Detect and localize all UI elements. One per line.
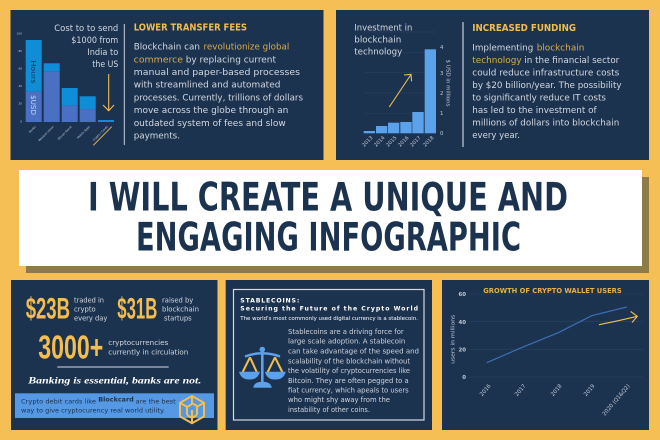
panel: growth of crypto wallet users xyxy=(442,280,649,430)
line chart: 20 xyxy=(458,348,466,354)
heading: INCREASED FUNDING xyxy=(472,23,576,34)
line chart: 2020 (Q1&Q2) xyxy=(602,383,632,417)
text block: blockchain xyxy=(537,44,584,54)
text block: who might shy away from the xyxy=(288,396,390,404)
line chart xyxy=(450,292,643,417)
callout: blockcard: Blockcard xyxy=(98,396,134,403)
stat: $23B: every day xyxy=(74,315,107,323)
bar chart: cost of sending money: Crypto / Cards xyxy=(92,124,109,142)
stat: 3000+: currently in circulation xyxy=(108,348,188,356)
arrow: trend xyxy=(599,312,637,325)
panel: stablecoins xyxy=(226,280,432,430)
heading: STABLECOINS: xyxy=(240,298,299,305)
bar chart: cost of sending money xyxy=(17,32,114,145)
bar chart: investment in blockchain xyxy=(361,45,451,148)
line chart: 2017 xyxy=(514,383,528,398)
text block xyxy=(134,43,303,142)
heading: Securing the Future of the Crypto World xyxy=(240,306,418,313)
bar chart: investment in blockchain: 3 xyxy=(440,71,443,77)
stat: $23B: $23B xyxy=(26,292,70,326)
text block: large scale adoption. A stablecoin xyxy=(288,338,405,346)
chart caption: $1000 from xyxy=(71,36,118,46)
subheading: The world's most commonly used digital currency is a stablecoin. xyxy=(239,316,418,322)
text block: can take advantage of the speed and xyxy=(288,348,419,356)
text block: by $20 billion/year. The possibility xyxy=(472,81,622,91)
text block xyxy=(288,328,419,414)
icon: blockcard logo xyxy=(180,396,204,423)
bar chart: cost of sending money: $USD xyxy=(29,95,38,115)
line chart: 0 xyxy=(462,375,466,381)
bar chart: investment in blockchain: 2014 xyxy=(373,135,386,148)
bar chart: investment in blockchain: 0 xyxy=(440,131,444,137)
text block: Stablecoins are a driving force for xyxy=(288,328,404,336)
quote: Banking is essential, banks are not. xyxy=(27,376,201,386)
heading: LOWER TRANSFER FEES xyxy=(134,23,247,34)
line chart: 60 xyxy=(458,292,466,298)
text block: Bitcoin. They are often pegged to a xyxy=(288,377,409,385)
callout: blockcard xyxy=(15,393,214,423)
text block: revolutionize global xyxy=(204,43,289,53)
bar chart: cost of sending money: Western Union xyxy=(37,125,55,142)
line chart: 2016 xyxy=(479,383,493,398)
text block: Blockchain can xyxy=(134,43,200,53)
bar chart: investment in blockchain: 2016 xyxy=(397,135,410,148)
bar chart: cost of sending money: 80 xyxy=(18,49,22,53)
chart caption: technology xyxy=(354,48,403,58)
text block: scalability of the blockchain without xyxy=(288,357,410,365)
text block: payments. xyxy=(134,132,180,142)
bar chart: cost of sending money: Mobile Apps xyxy=(76,125,91,140)
text block: commerce xyxy=(134,55,183,65)
text block: instability of other coins. xyxy=(288,406,370,414)
bar chart: cost of sending money: 0 xyxy=(20,120,22,124)
text block: millions of dollars into blockchain xyxy=(472,118,619,128)
text block: move across the globe through an xyxy=(134,106,288,116)
bar chart: cost of sending money: 40 xyxy=(18,84,22,88)
stat: $31B: raised by xyxy=(162,296,193,304)
chart caption: India to xyxy=(87,48,119,58)
heading: GROWTH OF CRYPTO WALLET USERS xyxy=(483,286,622,295)
bar chart: cost of sending money: Hours xyxy=(29,60,38,84)
bar chart: investment in blockchain: 1 xyxy=(440,111,443,117)
text block: with streamlined and automated xyxy=(134,81,280,91)
text block: Implementing xyxy=(472,44,533,54)
bar chart: investment in blockchain: 4 xyxy=(440,45,444,51)
arrow: up xyxy=(389,74,412,107)
text block: by replacing current xyxy=(186,55,276,65)
chart caption xyxy=(354,24,412,58)
bar chart: cost of sending money: 100 xyxy=(17,32,22,36)
text block: every year. xyxy=(472,131,520,141)
bar chart: investment in blockchain: $ USD in millions xyxy=(445,60,451,107)
text block: fiat currency, which apeals to users xyxy=(288,386,409,394)
bar chart: cost of sending money: 60 xyxy=(18,67,22,71)
title xyxy=(88,174,568,260)
line chart: 2019 xyxy=(583,383,597,398)
text block: outdated system of fees and slow xyxy=(134,119,286,129)
panel: lower transfer fees xyxy=(10,10,324,160)
text block: to significantly reduce IT costs xyxy=(472,93,606,103)
chart caption: blockchain xyxy=(354,36,401,46)
text block xyxy=(472,44,622,141)
text block: in the financial sector xyxy=(524,56,620,66)
chart caption xyxy=(54,24,119,70)
stat: $23B: crypto xyxy=(74,305,96,313)
bar chart: investment in blockchain: 2015 xyxy=(385,135,398,148)
text block: has led to the investment of xyxy=(472,106,597,116)
text block: manual and paper-based processes xyxy=(134,68,300,78)
panel: crypto statistics xyxy=(11,280,218,430)
bar chart: cost of sending money: Banks xyxy=(28,124,37,134)
line chart: 40 xyxy=(458,320,466,326)
bar chart: investment in blockchain: 2 xyxy=(440,91,443,97)
bar chart: cost of sending money: Bitcoin Remit xyxy=(57,124,73,141)
stat: 3000+: cryptocurrencies xyxy=(108,339,169,347)
stat: 3000+: 3000+ xyxy=(38,328,103,366)
chart caption: the US xyxy=(92,60,119,70)
line chart: users in millions xyxy=(450,315,456,364)
text block: the volatility of cryptocurrencies like xyxy=(288,367,410,375)
panel: increased funding xyxy=(336,10,649,160)
stat: $31B: startups xyxy=(164,315,192,323)
stat: $31B: $31B xyxy=(117,292,157,326)
text block: technology xyxy=(472,56,522,66)
bar chart: investment in blockchain: 2018 xyxy=(422,135,435,148)
text block: processes. Currently, trillions of dollars xyxy=(134,93,303,103)
heading xyxy=(240,298,418,313)
callout: blockcard: Crypto debit cards like xyxy=(21,398,96,405)
text block: could reduce infrastructure costs xyxy=(472,69,620,79)
callout: blockcard: way to give cryptocurency real world utility. xyxy=(21,408,165,415)
title banner xyxy=(19,170,649,273)
bar chart: cost of sending money: 20 xyxy=(18,102,22,106)
bar chart: investment in blockchain: 2017 xyxy=(409,135,422,148)
stat: 3000+ xyxy=(38,328,188,366)
chart caption: Investment in xyxy=(354,24,412,34)
icon: balance scale xyxy=(239,347,286,388)
stat: $23B: traded in xyxy=(74,296,104,304)
callout: blockcard: are the best xyxy=(136,398,176,405)
arrow: down xyxy=(103,74,114,111)
stat: $31B: blockchain xyxy=(162,305,199,313)
chart caption: Cost to to send xyxy=(54,24,118,34)
line chart: 2018 xyxy=(550,383,564,398)
bar chart: investment in blockchain: 2013 xyxy=(361,135,374,148)
